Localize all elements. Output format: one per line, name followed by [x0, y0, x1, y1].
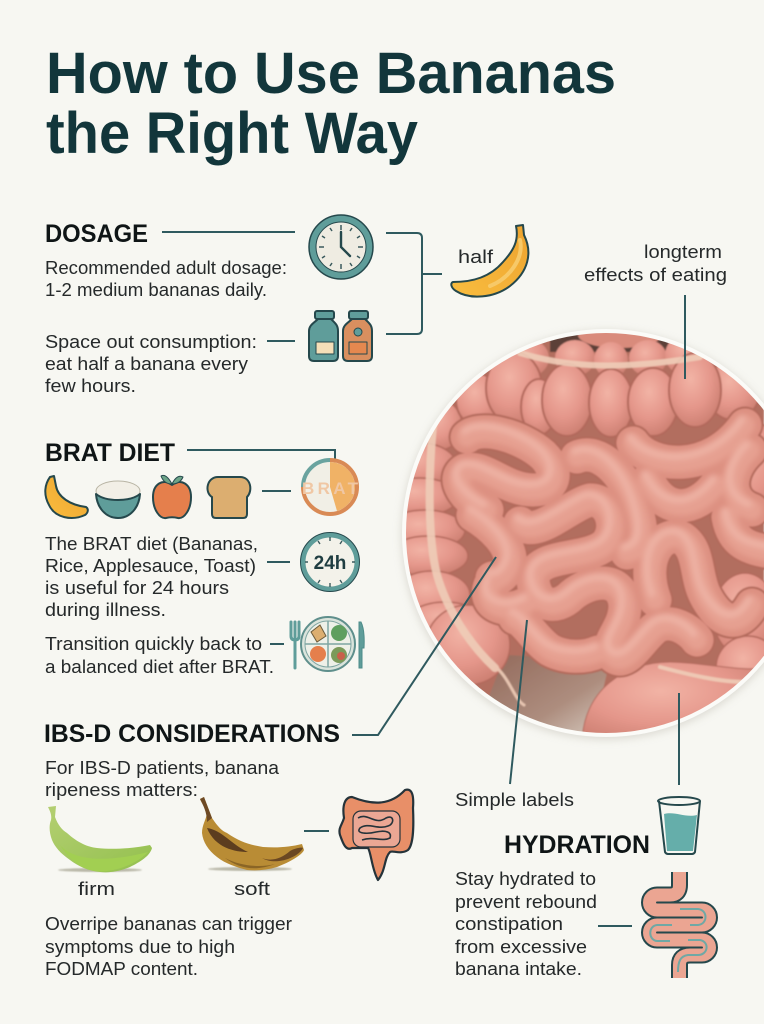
connector: foods to BRAT clock: [262, 490, 291, 492]
label: longterm effects of eating: [584, 241, 727, 285]
text: transition: a balanced diet after BRAT.: [45, 656, 274, 677]
title: the Right Way: [46, 101, 418, 166]
icon: gut: [339, 790, 413, 880]
connector: space out to bottles: [267, 340, 295, 342]
pale ribbons: [430, 353, 745, 705]
text: hydration advice: banana intake.: [455, 958, 582, 979]
label: firm: firm: [78, 878, 115, 899]
text: hydration advice: prevent rebound: [455, 891, 597, 912]
right side folds: [716, 424, 764, 669]
heading: hydration: HYDRATION: [504, 831, 650, 859]
icon: banana half: [451, 225, 528, 297]
text: recommended dosage: 1-2 medium bananas daily.: [45, 279, 267, 300]
heading: dosage: DOSAGE: [45, 220, 148, 248]
leader line: hydration: [678, 693, 680, 785]
image: brown banana: [200, 797, 304, 871]
icon: BRAT clock: [302, 460, 359, 514]
text: recommended dosage: [45, 257, 287, 300]
image: intestine circle: [382, 322, 764, 745]
connector: BRAT to clock: [187, 450, 335, 460]
connector: banana to gut icon: [304, 830, 329, 832]
text: overripe warning: Overripe bananas can trigger: [45, 913, 292, 934]
back colon row: [522, 339, 692, 374]
text: transition: Transition quickly back to: [45, 633, 262, 654]
top dark gap: [549, 335, 670, 353]
connector: dosage to clock: [162, 231, 295, 233]
text: BRAT description: is useful for 24 hours: [45, 577, 229, 598]
connector: transition to plate: [270, 643, 284, 645]
label: half: half: [458, 246, 494, 267]
text: recommended dosage: Recommended adult dosage:: [45, 257, 287, 278]
text: overripe warning: FODMAP content.: [45, 958, 198, 979]
connector: text to digestive icon: [598, 925, 632, 927]
text: overripe warning: [45, 913, 292, 979]
image: green banana: [48, 806, 152, 872]
small bowel tubes: [456, 419, 764, 659]
text: IBS-D ripeness: [45, 757, 280, 800]
text: BRAT description: Rice, Applesauce, Toast): [45, 555, 256, 576]
lower large loop: [582, 662, 754, 733]
heading: BRAT diet: BRAT DIET: [45, 439, 175, 467]
text: BRAT description: The BRAT diet (Bananas,: [45, 533, 258, 554]
icon: plate with cutlery: [291, 617, 364, 671]
label: simple labels: Simple labels: [455, 789, 574, 810]
label: longterm effects of eating: longterm: [644, 241, 722, 262]
text: IBS-D ripeness: ripeness matters:: [45, 779, 198, 800]
leader line: simple labels: [510, 620, 527, 784]
text: space out consumption: eat half a banana every: [45, 353, 249, 374]
text: hydration advice: constipation: [455, 913, 563, 934]
gap at bottom of the abdomen: [490, 655, 607, 732]
title: [46, 41, 616, 166]
leader line: IBS-D to intestine: [352, 557, 496, 735]
icon: toast: [207, 477, 250, 518]
connector: text to 24h clock: [267, 561, 290, 563]
left colon ridges: [406, 405, 510, 684]
icon: 24h clock: 24h: [314, 553, 346, 574]
panel: hydration: [455, 797, 710, 979]
label: longterm effects of eating: effects of eating: [584, 264, 727, 285]
text: hydration advice: from excessive: [455, 936, 587, 957]
heading: IBS-D considerations: IBS-D CONSIDERATIONS: [44, 720, 340, 748]
icon: clock: [309, 215, 373, 279]
panel: IBS-D considerations: [44, 720, 413, 979]
title: How to Use Bananas: [46, 41, 616, 106]
text: BRAT description: [45, 533, 258, 620]
text: IBS-D ripeness: For IBS-D patients, banana: [45, 757, 280, 778]
icon: BRAT clock: BRAT: [302, 479, 359, 498]
text: overripe warning: symptoms due to high: [45, 936, 235, 957]
icon: water glass: [658, 797, 700, 854]
text: hydration advice: Stay hydrated to: [455, 868, 596, 889]
text: BRAT description: during illness.: [45, 599, 166, 620]
icon: 24h clock: [300, 532, 360, 592]
text: space out consumption: Space out consumption:: [45, 331, 257, 352]
leader line: longterm effects: [684, 295, 686, 379]
text: space out consumption: [45, 331, 257, 396]
label: soft: soft: [234, 878, 270, 899]
connector: bracket: [386, 233, 442, 334]
text: transition: [45, 633, 274, 677]
front colon haustra: [456, 352, 760, 437]
text: space out consumption: few hours.: [45, 375, 136, 396]
text: hydration advice: [455, 868, 597, 979]
icon: rice bowl: [96, 481, 140, 518]
icon: apple: [153, 475, 191, 518]
icon: bottles: [309, 311, 372, 361]
shadow: intestine photo: [401, 330, 764, 740]
icon: digestive tract: [650, 872, 710, 978]
icon: banana: [45, 476, 88, 518]
panel: dosage: [45, 215, 528, 396]
panel: BRAT diet: [45, 439, 364, 677]
